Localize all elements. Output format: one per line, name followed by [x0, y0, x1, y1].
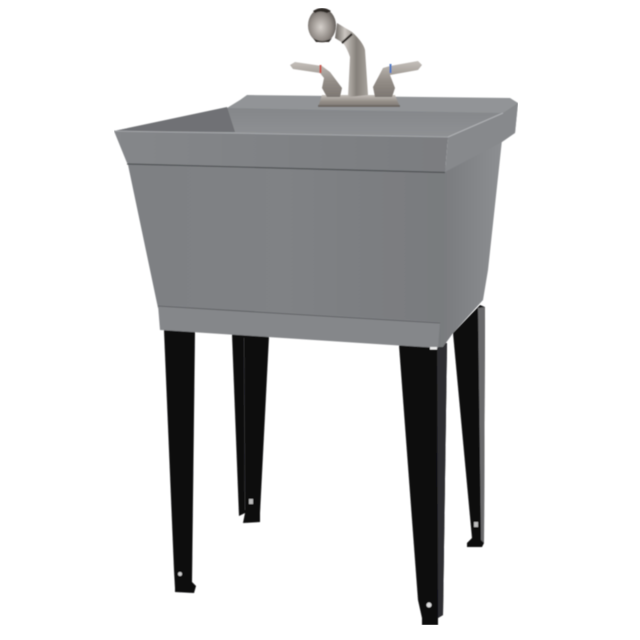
faucet	[290, 8, 422, 107]
right handle	[373, 61, 422, 97]
back right leg	[453, 305, 485, 547]
faucet deck plate	[318, 95, 400, 107]
front left leg	[164, 330, 196, 593]
rim front	[114, 131, 448, 172]
lower band front	[158, 305, 440, 348]
rim side	[445, 103, 518, 172]
sink tub	[114, 95, 518, 350]
back left leg	[232, 334, 269, 523]
tub body side	[436, 140, 502, 347]
basin inner back wall	[227, 108, 503, 137]
tub body front	[127, 160, 445, 325]
spray head	[308, 8, 336, 42]
back deck	[114, 95, 518, 140]
faucet neck and spout	[335, 23, 368, 97]
basin inner left wall	[114, 107, 235, 132]
left handle	[290, 62, 342, 97]
notch under front corner	[430, 347, 437, 350]
front right leg	[399, 343, 447, 625]
